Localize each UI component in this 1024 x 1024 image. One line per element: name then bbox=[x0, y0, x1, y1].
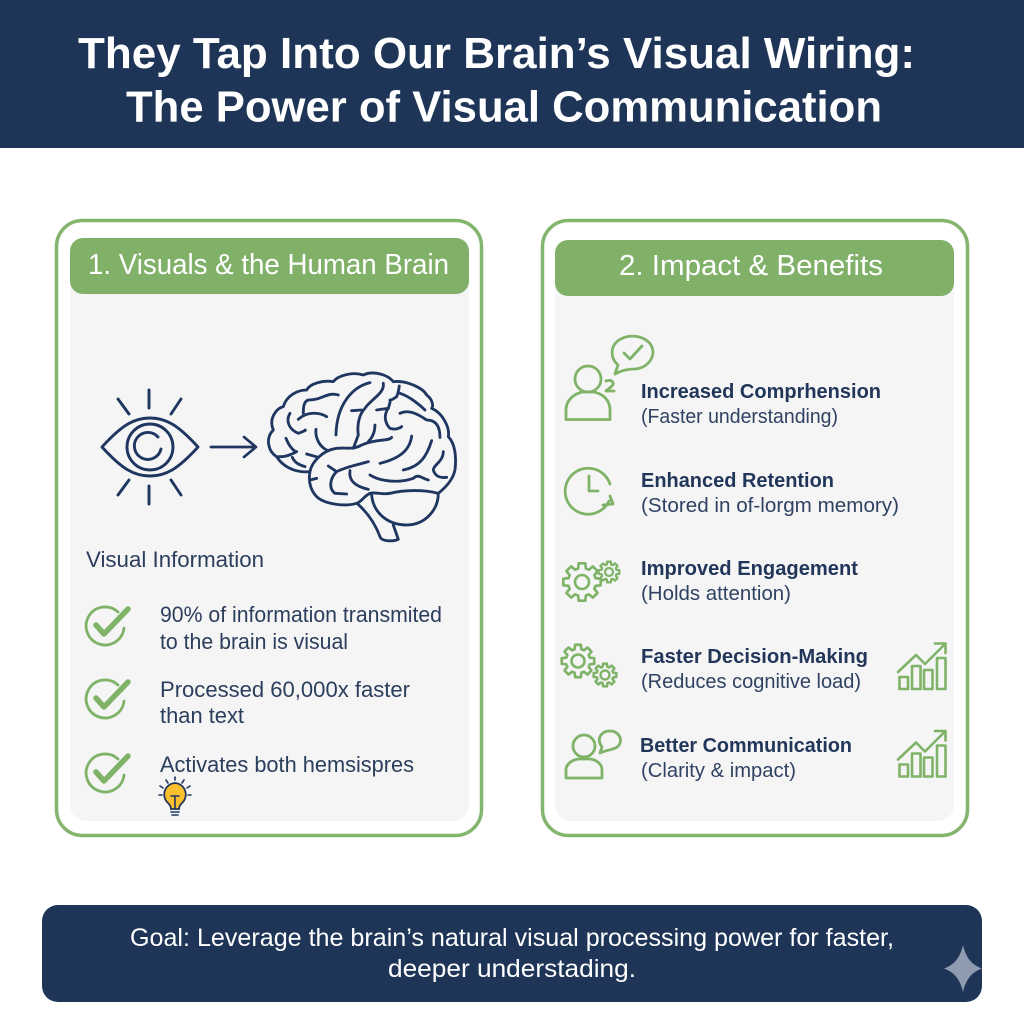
icon: check 2 bbox=[86, 680, 128, 718]
goal banner bbox=[42, 905, 982, 1002]
icon: gears bbox=[562, 645, 616, 686]
arrow: eye to brain bbox=[211, 437, 256, 457]
benefit: enhanced retention bbox=[565, 468, 899, 517]
list item: 60,000x bbox=[86, 677, 410, 728]
icon: sparkle bbox=[944, 945, 982, 992]
panel heading 1: 1. Visuals & the Human Brain bbox=[88, 249, 449, 281]
list item: 90 percent bbox=[86, 602, 442, 654]
label: visual information: Visual Information bbox=[86, 547, 264, 572]
list item: 60,000x: Processed 60,000x faster bbox=[160, 677, 410, 702]
title banner bbox=[0, 0, 1024, 148]
icon: clock bbox=[565, 468, 613, 514]
list item: 90 percent: to the brain is visual bbox=[160, 629, 348, 654]
icon: light bulb bbox=[159, 777, 191, 815]
benefit: better communication: (Clarity & impact) bbox=[641, 759, 796, 782]
icon: check 1 bbox=[86, 607, 128, 645]
goal text: Goal: Leverage the brain’s natural visual processing power for faster, bbox=[130, 924, 894, 952]
icon: person with check bubble bbox=[566, 336, 653, 420]
panel: visuals and the human brain bbox=[56, 220, 482, 836]
title line 1: They Tap Into Our Brain’s Visual Wiring: bbox=[78, 30, 915, 78]
benefit: faster decision-making: (Reduces cognitive load) bbox=[641, 670, 861, 693]
icon: person with speech bubble bbox=[566, 731, 621, 778]
benefit: better communication: Better Communication bbox=[640, 735, 852, 757]
benefit: faster decision-making: Faster Decision-Making bbox=[641, 646, 868, 668]
benefit: better communication bbox=[566, 731, 946, 782]
list item: 60,000x: than text bbox=[160, 703, 245, 728]
goal text: deeper understading. bbox=[388, 955, 636, 983]
benefit: improved engagement: Improved Engagement bbox=[641, 558, 858, 580]
list item: hemispheres: Activates both hemsispres bbox=[160, 752, 414, 777]
list item: hemispheres bbox=[86, 752, 414, 792]
panel heading 2: 2. Impact & Benefits bbox=[619, 250, 883, 282]
icon: growth chart bbox=[898, 644, 946, 689]
benefit: increased comprehension bbox=[566, 336, 881, 428]
benefit: improved engagement bbox=[563, 558, 858, 605]
benefit: enhanced retention: (Stored in of-lorgm memory) bbox=[641, 494, 899, 517]
benefit: improved engagement: (Holds attention) bbox=[641, 582, 791, 605]
benefit: increased comprehension: Increased Comprhension bbox=[641, 381, 881, 403]
icon: brain bbox=[268, 373, 456, 541]
title line 2: The Power of Visual Communication bbox=[126, 84, 882, 132]
icon: check 3 bbox=[86, 754, 128, 792]
icon: eye bbox=[102, 390, 198, 504]
goal text bbox=[130, 924, 894, 983]
icon: growth chart bbox=[898, 731, 946, 776]
icon: gears bbox=[563, 562, 619, 601]
panel heading 2 bbox=[555, 240, 954, 296]
benefit: faster decision-making bbox=[562, 644, 946, 693]
list item: 90 percent: 90% of information transmited bbox=[160, 602, 442, 627]
benefit: increased comprehension: (Faster understanding) bbox=[641, 405, 838, 428]
panel heading 1 bbox=[70, 238, 469, 294]
benefit: enhanced retention: Enhanced Retention bbox=[641, 470, 834, 492]
panel: impact and benefits bbox=[542, 220, 968, 836]
